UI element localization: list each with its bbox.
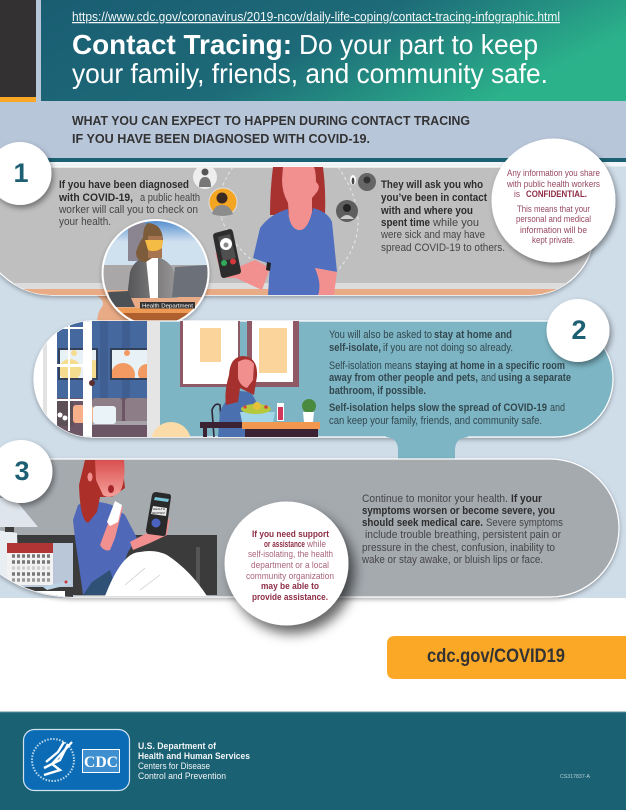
callout: confidential: personal and medical (516, 213, 591, 224)
text: monitor your health (361, 493, 563, 566)
header banner (0, 0, 626, 102)
phone (213, 229, 241, 278)
wall picture: right (247, 321, 299, 387)
text: contacts question: were sick and may have (380, 229, 485, 241)
text: public health worker call (58, 179, 200, 228)
illustration: sick woman in bed (73, 460, 207, 596)
text: self-isolation definition (329, 360, 571, 397)
logo: HHS and CDC (24, 730, 130, 790)
illustration: health department worker (100, 219, 212, 329)
callout: support: If you need support (252, 528, 329, 539)
text: slows the spread: and (550, 402, 565, 414)
website button (387, 636, 626, 679)
text: self-isolation definition: away from other people and pets, (329, 372, 478, 384)
phone: health department call: HEALTH (153, 507, 165, 511)
text: monitor your health: include trouble breathing, persistent pain or (365, 529, 561, 541)
callout: confidential: kept private. (532, 234, 575, 245)
illustration: woman on phone (215, 167, 337, 295)
text: public health worker call: your health. (59, 216, 111, 228)
illustration: room through doorway (34, 321, 160, 437)
publication code: CS317837-A (560, 774, 591, 780)
text: self-isolation definition: bathroom, if possible. (329, 385, 426, 397)
text: stay at home: stay at home and (434, 329, 512, 341)
callout: support: may be able to (261, 580, 319, 591)
agency name: Health and Human Services (138, 751, 250, 762)
text: public health worker call: with COVID-19, (58, 192, 133, 204)
avatar: dark person (336, 200, 358, 222)
text: contacts question: They will ask you who (381, 179, 483, 191)
badge: step 1: 1 (13, 158, 29, 188)
text: contacts question: spread COVID-19 to others. (381, 242, 505, 254)
callout: support: department or a local (251, 559, 329, 570)
text: slows the spread: can keep your family, friends, and community safe. (329, 415, 542, 427)
callout: support: or assistance (264, 538, 305, 549)
callout: confidential: Any information you share (507, 167, 600, 178)
badge: step 3 (0, 440, 52, 503)
subtitle (72, 113, 470, 146)
text: slows the spread (329, 402, 565, 427)
avatar: dark gray person (350, 173, 376, 191)
website button: cdc.gov/COVID19 (427, 646, 565, 667)
text: public health worker call: worker will call you to check on (58, 204, 198, 216)
connector: step 1 to step 2 (78, 290, 160, 325)
agency name: Control and Prevention (138, 771, 226, 782)
panel: step 1 (0, 165, 626, 295)
text: self-isolation definition: and (481, 372, 496, 384)
text: self-isolation definition: using a separate (498, 372, 571, 384)
text: stay at home (329, 329, 513, 354)
callout: support (224, 502, 348, 626)
avatar: gray person (193, 165, 217, 189)
phone: health department call (146, 492, 171, 536)
text: slows the spread: Self-isolation helps slow the spread of COVID-19 (329, 402, 547, 414)
panel: step 2 (31, 320, 616, 442)
agency name (138, 741, 250, 782)
text: public health worker call: If you have been diagnosed (59, 179, 189, 191)
agency name: U.S. Department of (138, 741, 217, 752)
peach rug (152, 422, 190, 437)
panel: step 3 (0, 459, 619, 597)
text: monitor your health: Severe symptoms (486, 517, 563, 529)
callout: support: self-isolating, the health (248, 548, 333, 559)
footer (0, 712, 626, 810)
text: monitor your health: wake or stay awake, or bluish lips or face. (361, 554, 543, 566)
calendar (7, 543, 53, 585)
text: public health worker call: a public health (140, 192, 200, 204)
title: your family, friends, and community safe. (72, 58, 548, 89)
wall picture: left (180, 321, 240, 387)
text: stay at home: self-isolate, (329, 342, 381, 354)
callout: support: while (306, 538, 326, 549)
text: contacts question: you’ve been in contact (381, 192, 487, 204)
divider line (0, 158, 626, 166)
agency name: Centers for Disease (138, 761, 210, 772)
callout: support: community organization (246, 570, 334, 581)
text: self-isolation definition: staying at home in a specific room (415, 360, 565, 372)
illustration: health department worker: Health Department (142, 303, 194, 309)
text: stay at home: if you are not doing so already. (383, 342, 513, 354)
callout: support: provide assistance. (252, 591, 328, 602)
thermometer and nightstand (23, 580, 73, 597)
callout: confidential (492, 138, 616, 262)
badge: step 1 (0, 142, 52, 205)
dashed contact lines (220, 167, 358, 270)
callout: confidential: is (514, 188, 520, 199)
text: monitor your health: symptoms worsen or become severe, you (362, 505, 555, 517)
callout: confidential: information will be (520, 224, 587, 235)
logo: HHS and CDC: CDC (84, 754, 118, 771)
illustration: bedside (0, 498, 217, 597)
text: monitor your health: If your (511, 493, 543, 505)
text: monitor your health: Continue to monitor your health. (362, 493, 508, 505)
text: contacts question: with and where you (380, 205, 473, 217)
avatar: orange person (209, 188, 237, 216)
subtitle: WHAT YOU CAN EXPECT TO HAPPEN DURING CONTACT TRACING (72, 113, 470, 128)
potted plant (302, 399, 316, 422)
callout: confidential: with public health workers (506, 178, 600, 189)
text: monitor your health: pressure in the chest, confusion, inability to (362, 542, 555, 554)
text: contacts question (380, 179, 505, 254)
title: Contact Tracing: (72, 29, 292, 60)
text: contacts question: while you (432, 217, 479, 229)
title (72, 29, 548, 89)
connector: step 2 to step 3 (386, 435, 468, 461)
text: monitor your health: should seek medical care. (362, 517, 483, 529)
callout: confidential: This means that your (517, 203, 590, 214)
badge: step 2: 2 (571, 315, 587, 345)
badge: step 3: 3 (14, 456, 30, 486)
table (200, 422, 320, 437)
text: self-isolation definition: Self-isolation means (329, 360, 412, 372)
subtitle: IF YOU HAVE BEEN DIAGNOSED WITH COVID-19. (72, 131, 370, 146)
text: stay at home: You will also be asked to (329, 329, 432, 341)
phone: health department call: DEPARTMENT (152, 511, 165, 515)
source url: https://www.cdc.gov/coronavirus/2019-ncov/daily-life-coping/contact-tracing-infographic.html (72, 10, 560, 24)
glass (277, 403, 284, 421)
callout: confidential: CONFIDENTIAL. (526, 188, 587, 199)
text: contacts question: spent time (381, 217, 430, 229)
title: Do your part to keep (299, 29, 538, 60)
badge: step 2 (546, 299, 610, 362)
illustration: woman at table (212, 356, 275, 437)
